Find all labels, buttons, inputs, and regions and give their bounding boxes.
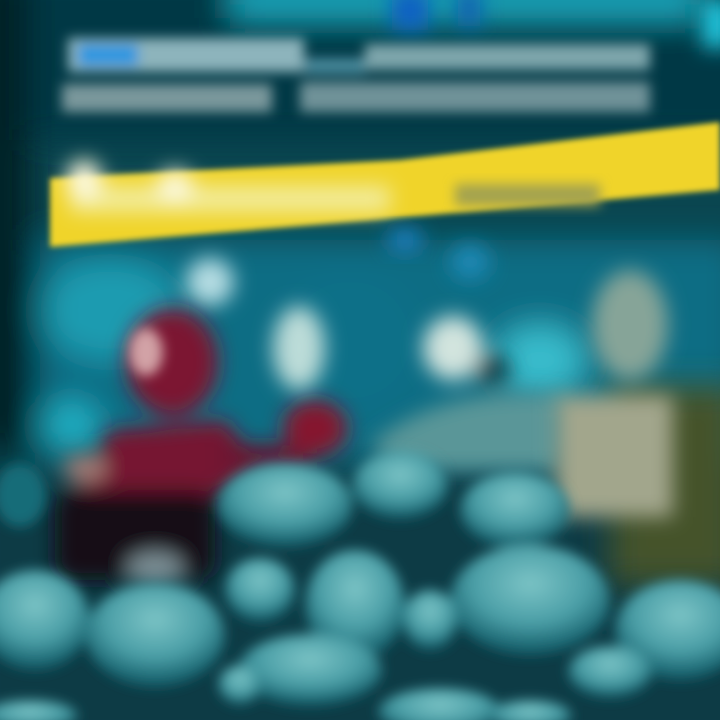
figure: beige person xyxy=(555,270,720,585)
top blue accents xyxy=(392,0,720,48)
banner subheading xyxy=(455,184,600,206)
title block xyxy=(62,38,650,112)
figure: red hooded person xyxy=(55,308,347,584)
figure: pale person xyxy=(370,316,560,470)
white bulb xyxy=(273,306,325,390)
spheres xyxy=(0,451,720,720)
glowing accents xyxy=(186,228,490,306)
yellow banner xyxy=(50,122,720,247)
banner heading xyxy=(66,160,390,212)
